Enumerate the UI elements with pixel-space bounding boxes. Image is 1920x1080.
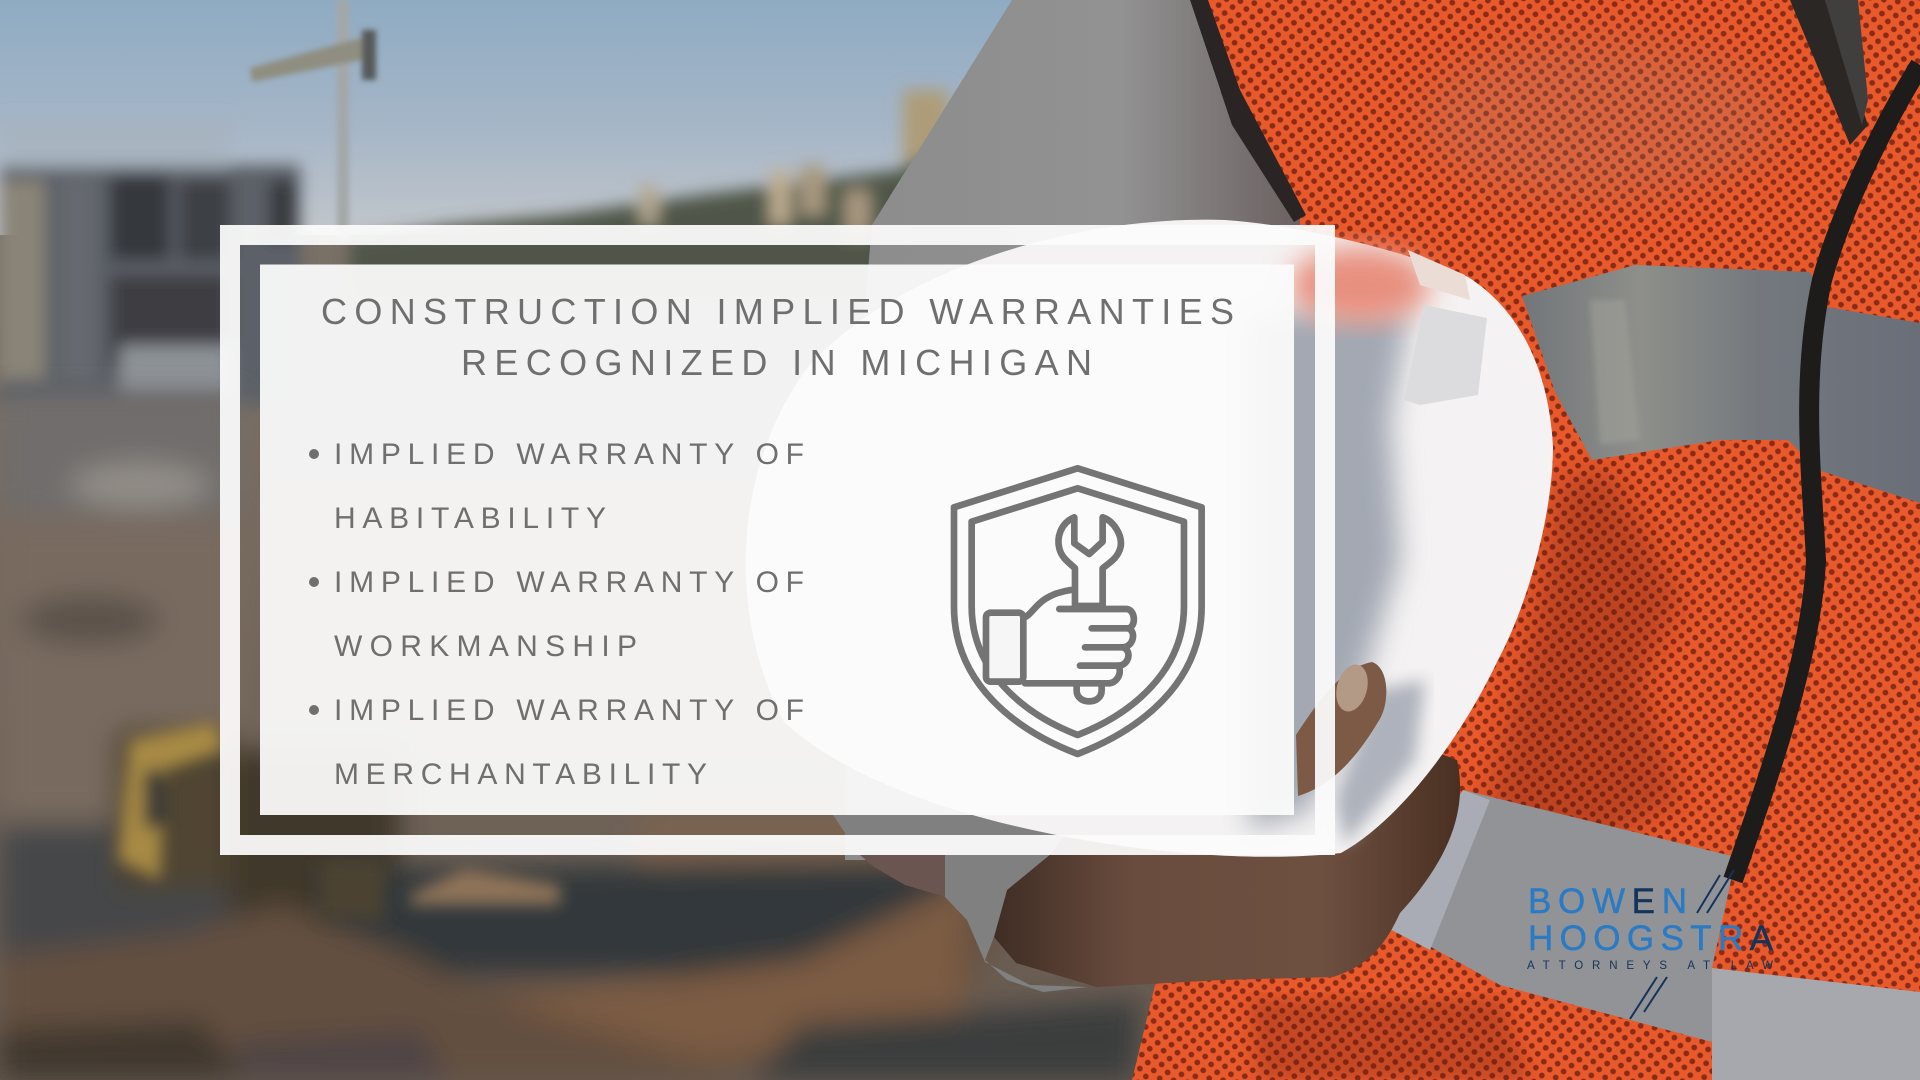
main white content panel [260,264,1294,815]
white hard hat [746,220,1553,857]
outer translucent white frame [220,225,1335,855]
item: workmanship [309,566,804,663]
upper reflective strip on vest [1522,265,1920,503]
item: habitability: HABITABILITY [334,502,606,535]
hand holding the hat [994,700,1460,987]
item: merchantability: IMPLIED WARRANTY OF [334,694,804,727]
logo: Bowen Hoogstra Attorneys at Law: BOWEN [1528,882,1687,921]
item: merchantability: MERCHANTABILITY [334,758,707,791]
logo: Bowen Hoogstra Attorneys at Law: HOOGSTRA [1528,919,1774,958]
title [321,291,1234,383]
item: merchantability [309,694,804,791]
item: habitability [309,438,804,535]
vest centre trim [1733,65,1920,880]
logo: Bowen Hoogstra Attorneys at Law [1527,870,1774,1019]
sleeve cuff [833,815,1088,992]
item: habitability: IMPLIED WARRANTY OF [334,438,804,471]
thumb on hat [1296,661,1386,796]
blurred construction site [0,0,1240,1080]
vest collar trim [1190,0,1306,222]
item: workmanship: WORKMANSHIP [334,630,637,663]
icon: shield with hand holding wrench [954,468,1202,754]
zip placket at top [1790,0,1868,145]
title: CONSTRUCTION IMPLIED WARRANTIES [321,291,1234,332]
lower reflective strip on vest [1382,790,1920,1080]
bulleted list of warranties [309,438,804,791]
logo: Bowen Hoogstra Attorneys at Law: ATTORNEYS AT LAW [1527,960,1773,972]
title: RECOGNIZED IN MICHIGAN [461,342,1092,383]
item: workmanship: IMPLIED WARRANTY OF [334,566,804,599]
orange mesh safety vest [1132,0,1920,1080]
worker grey sleeve [845,0,1305,860]
